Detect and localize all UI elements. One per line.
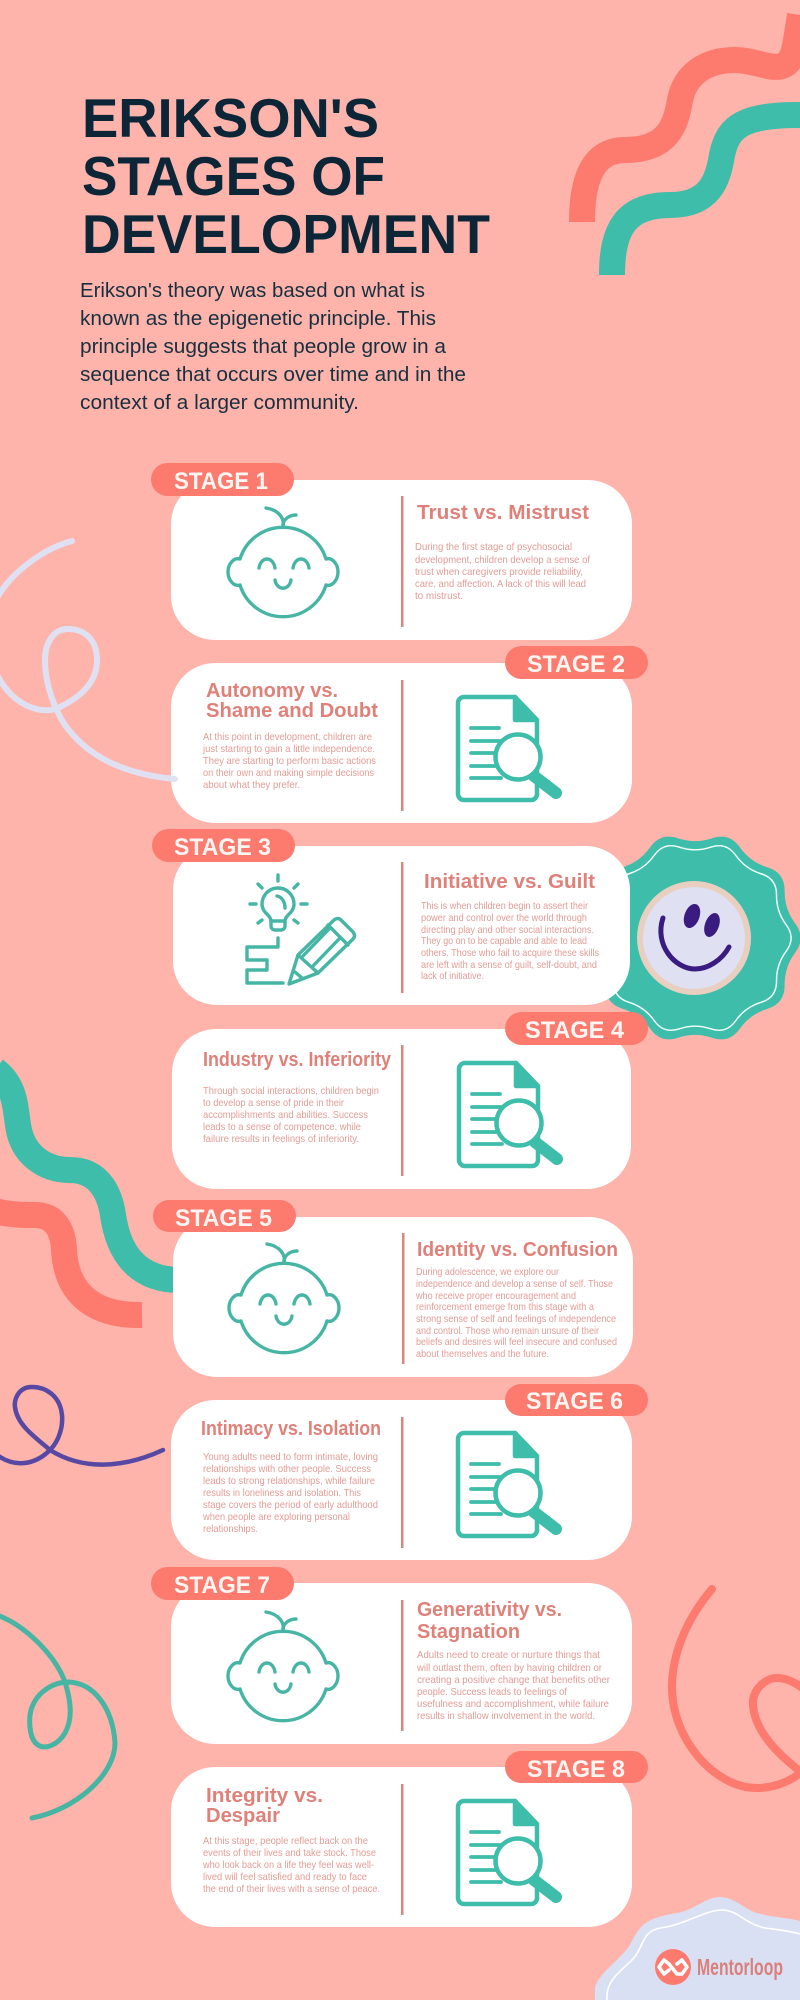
body text: to develop a sense of pride in their [203,1097,344,1109]
heading: Integrity vs. Despair [206,1784,323,1827]
body text: During the first stage of psychosocial [415,541,572,553]
decoration: top-right teal wave [612,115,800,275]
body text [202,731,376,791]
body text: who receive proper encouragement and [415,1290,576,1302]
label: stage 5 pill [153,1200,296,1232]
heading: Initiative vs. Guilt: Initiative vs. Guilt [424,870,595,893]
body text: are left with a sense of guilt, self-doubt, and [421,959,597,971]
body text: leads to a sense of competence, while [203,1121,361,1133]
title: STAGES OF [82,145,385,207]
panel: stage 8 [171,1767,632,1927]
title: ERIKSON'S [82,87,379,149]
intro paragraph: principle suggests that people grow in a [80,336,447,358]
label: stage 1 pill: STAGE 1 [174,468,268,495]
decoration: lavender loop [0,541,175,779]
body text: During adolescence, we explore our [416,1266,559,1278]
decoration: left coral wave [0,1211,142,1315]
body text: development, children develop a sense of [415,554,590,566]
heading: Identity vs. Confusion: Identity vs. Confusion [417,1238,618,1261]
icon: baby face [228,508,338,617]
decoration: top-right coral wave [582,15,800,222]
intro paragraph [80,280,466,414]
body text: stage covers the period of early adulthood [203,1499,378,1511]
body text: creating a positive change that benefits other [417,1674,610,1686]
label: stage 6 pill: STAGE 6 [526,1388,623,1415]
heading: Autonomy vs. Shame and Doubt: Shame and Doubt [206,699,378,722]
icon: light bulb and pencil [247,875,354,984]
body text: Young adults need to form intimate, loving [203,1451,378,1463]
body text: relationships. [203,1523,258,1535]
intro paragraph: sequence that occurs over time and in the [80,364,466,386]
body text: when people are exploring personal [202,1511,350,1523]
body text: leads to strong relationships, while failure [203,1475,375,1487]
body text [415,541,590,602]
body text [421,900,599,982]
intro paragraph: Erikson's theory was based on what is [80,280,425,302]
label: stage 1 pill [151,463,294,496]
label: stage 7 pill: STAGE 7 [174,1572,270,1599]
body text: At this point in development, children are [203,731,372,743]
decoration: coral curl right [672,1589,800,1788]
body text: and control. Those who remain unsure of their [416,1325,599,1337]
heading: Generativity vs. Stagnation [417,1598,562,1643]
body text: failure results in feelings of inferiority. [203,1133,359,1145]
body text [203,1085,379,1145]
body text: usefulness and accomplishment, while failure [417,1698,609,1710]
panel: stage 4 [172,1029,631,1189]
panel: stage 5 [173,1217,633,1377]
label: stage 4 pill: STAGE 4 [525,1017,625,1044]
title: DEVELOPMENT [82,203,490,265]
icon: document with magnifier [458,1433,556,1536]
body text: They go on to be capable and able to lead [421,935,587,947]
label: stage 7 pill [151,1567,294,1600]
intro paragraph: known as the epigenetic principle. This [80,308,436,330]
heading: Autonomy vs. Shame and Doubt [206,679,378,722]
heading: Generativity vs. Stagnation: Stagnation [417,1620,520,1643]
label: stage 3 pill [152,829,295,862]
decoration: left teal wave [0,1070,180,1280]
intro paragraph: context of a larger community. [80,392,359,414]
label: stage 2 pill: STAGE 2 [527,651,625,678]
label: stage 3 pill: STAGE 3 [174,834,271,861]
body text: They are starting to perform basic actions [203,755,376,767]
body text: about themselves and the future. [416,1348,549,1360]
body text [416,1649,610,1722]
body text: At this stage, people reflect back on the [203,1835,368,1847]
body text [202,1835,380,1895]
decoration: teal curl bottom-left [0,1615,115,1818]
heading: Intimacy vs. Isolation: Intimacy vs. Isolation [201,1417,381,1440]
heading: Integrity vs. Despair: Integrity vs. [206,1784,323,1807]
heading: Generativity vs. Stagnation: Generativity vs. [417,1598,562,1621]
label: stage 4 pill [505,1012,648,1045]
heading: Trust vs. Mistrust: Trust vs. Mistrust [417,501,589,524]
body text: reinforcement emerge from this stage with a [416,1301,594,1313]
body text: Through social interactions, children begin [203,1085,379,1097]
body text: trust when caregivers provide reliability, [415,566,583,578]
logo: Mentorloop [655,1949,783,1985]
body text: directing play and other social interactions. [421,924,594,936]
icon: document with magnifier [458,1801,556,1904]
body text: others. Those who fail to acquire these skills [421,947,599,959]
decoration: smiley badge [589,837,800,1039]
panel: stage 7 [171,1583,632,1744]
panel: stage 1 [171,480,632,640]
icon: baby face [228,1612,338,1721]
body text: just starting to gain a little independence. [202,743,375,755]
decoration: purple loop [0,1387,163,1465]
body text: people. Success leads to feelings of [417,1686,567,1698]
body text: the end of their lives with a sense of peace. [203,1883,380,1895]
panel: stage 2 [171,663,632,823]
panel: stage 3 [173,846,630,1005]
body text: strong sense of self and feelings of independence [416,1313,616,1325]
heading: Integrity vs. Despair: Despair [206,1804,280,1827]
body text: accomplishments and abilities. Success [203,1109,368,1121]
body text: relationships with other people. Success [203,1463,371,1475]
label: stage 2 pill [505,646,648,679]
body text [415,1266,617,1360]
body text [202,1451,378,1535]
body text: will outlast them, often by having children or [416,1662,602,1674]
body text: lack of initiative. [421,970,484,982]
body text: who look back on a life they feel was well- [202,1859,374,1871]
body text: power and control over the world through [421,912,587,924]
body text: lived will feel satisfied and ready to face [203,1871,367,1883]
body text: beliefs and desires will feel insecure and confused [416,1336,617,1348]
title [82,87,490,265]
body text: on their own and making simple decisions [203,767,374,779]
icon: baby face [229,1244,339,1353]
panel: stage 6 [171,1400,632,1560]
label: stage 6 pill [505,1384,648,1416]
label: stage 8 pill [505,1751,648,1783]
body text: This is when children begin to assert their [421,900,588,912]
body text: results in shallow involvement in the world. [417,1710,595,1722]
heading: Autonomy vs. Shame and Doubt: Autonomy vs. [206,679,338,702]
body text: independence and develop a sense of self. Those [416,1278,613,1290]
body text: to mistrust. [415,590,463,602]
body text: care, and affection. A lack of this will lead [415,578,586,590]
decoration: logo blob [595,1897,800,2000]
icon: document with magnifier [458,697,556,800]
body text: about what they prefer. [203,779,300,791]
icon: document with magnifier [459,1063,557,1166]
body text: Adults need to create or nurture things that [417,1649,600,1661]
body text: results in loneliness and isolation. This [203,1487,361,1499]
heading: Industry vs. Inferiority: Industry vs. Inferiority [203,1048,392,1071]
label: stage 8 pill: STAGE 8 [527,1756,625,1783]
body text: events of their lives and take stock. Those [203,1847,376,1859]
label: stage 5 pill: STAGE 5 [175,1205,272,1232]
